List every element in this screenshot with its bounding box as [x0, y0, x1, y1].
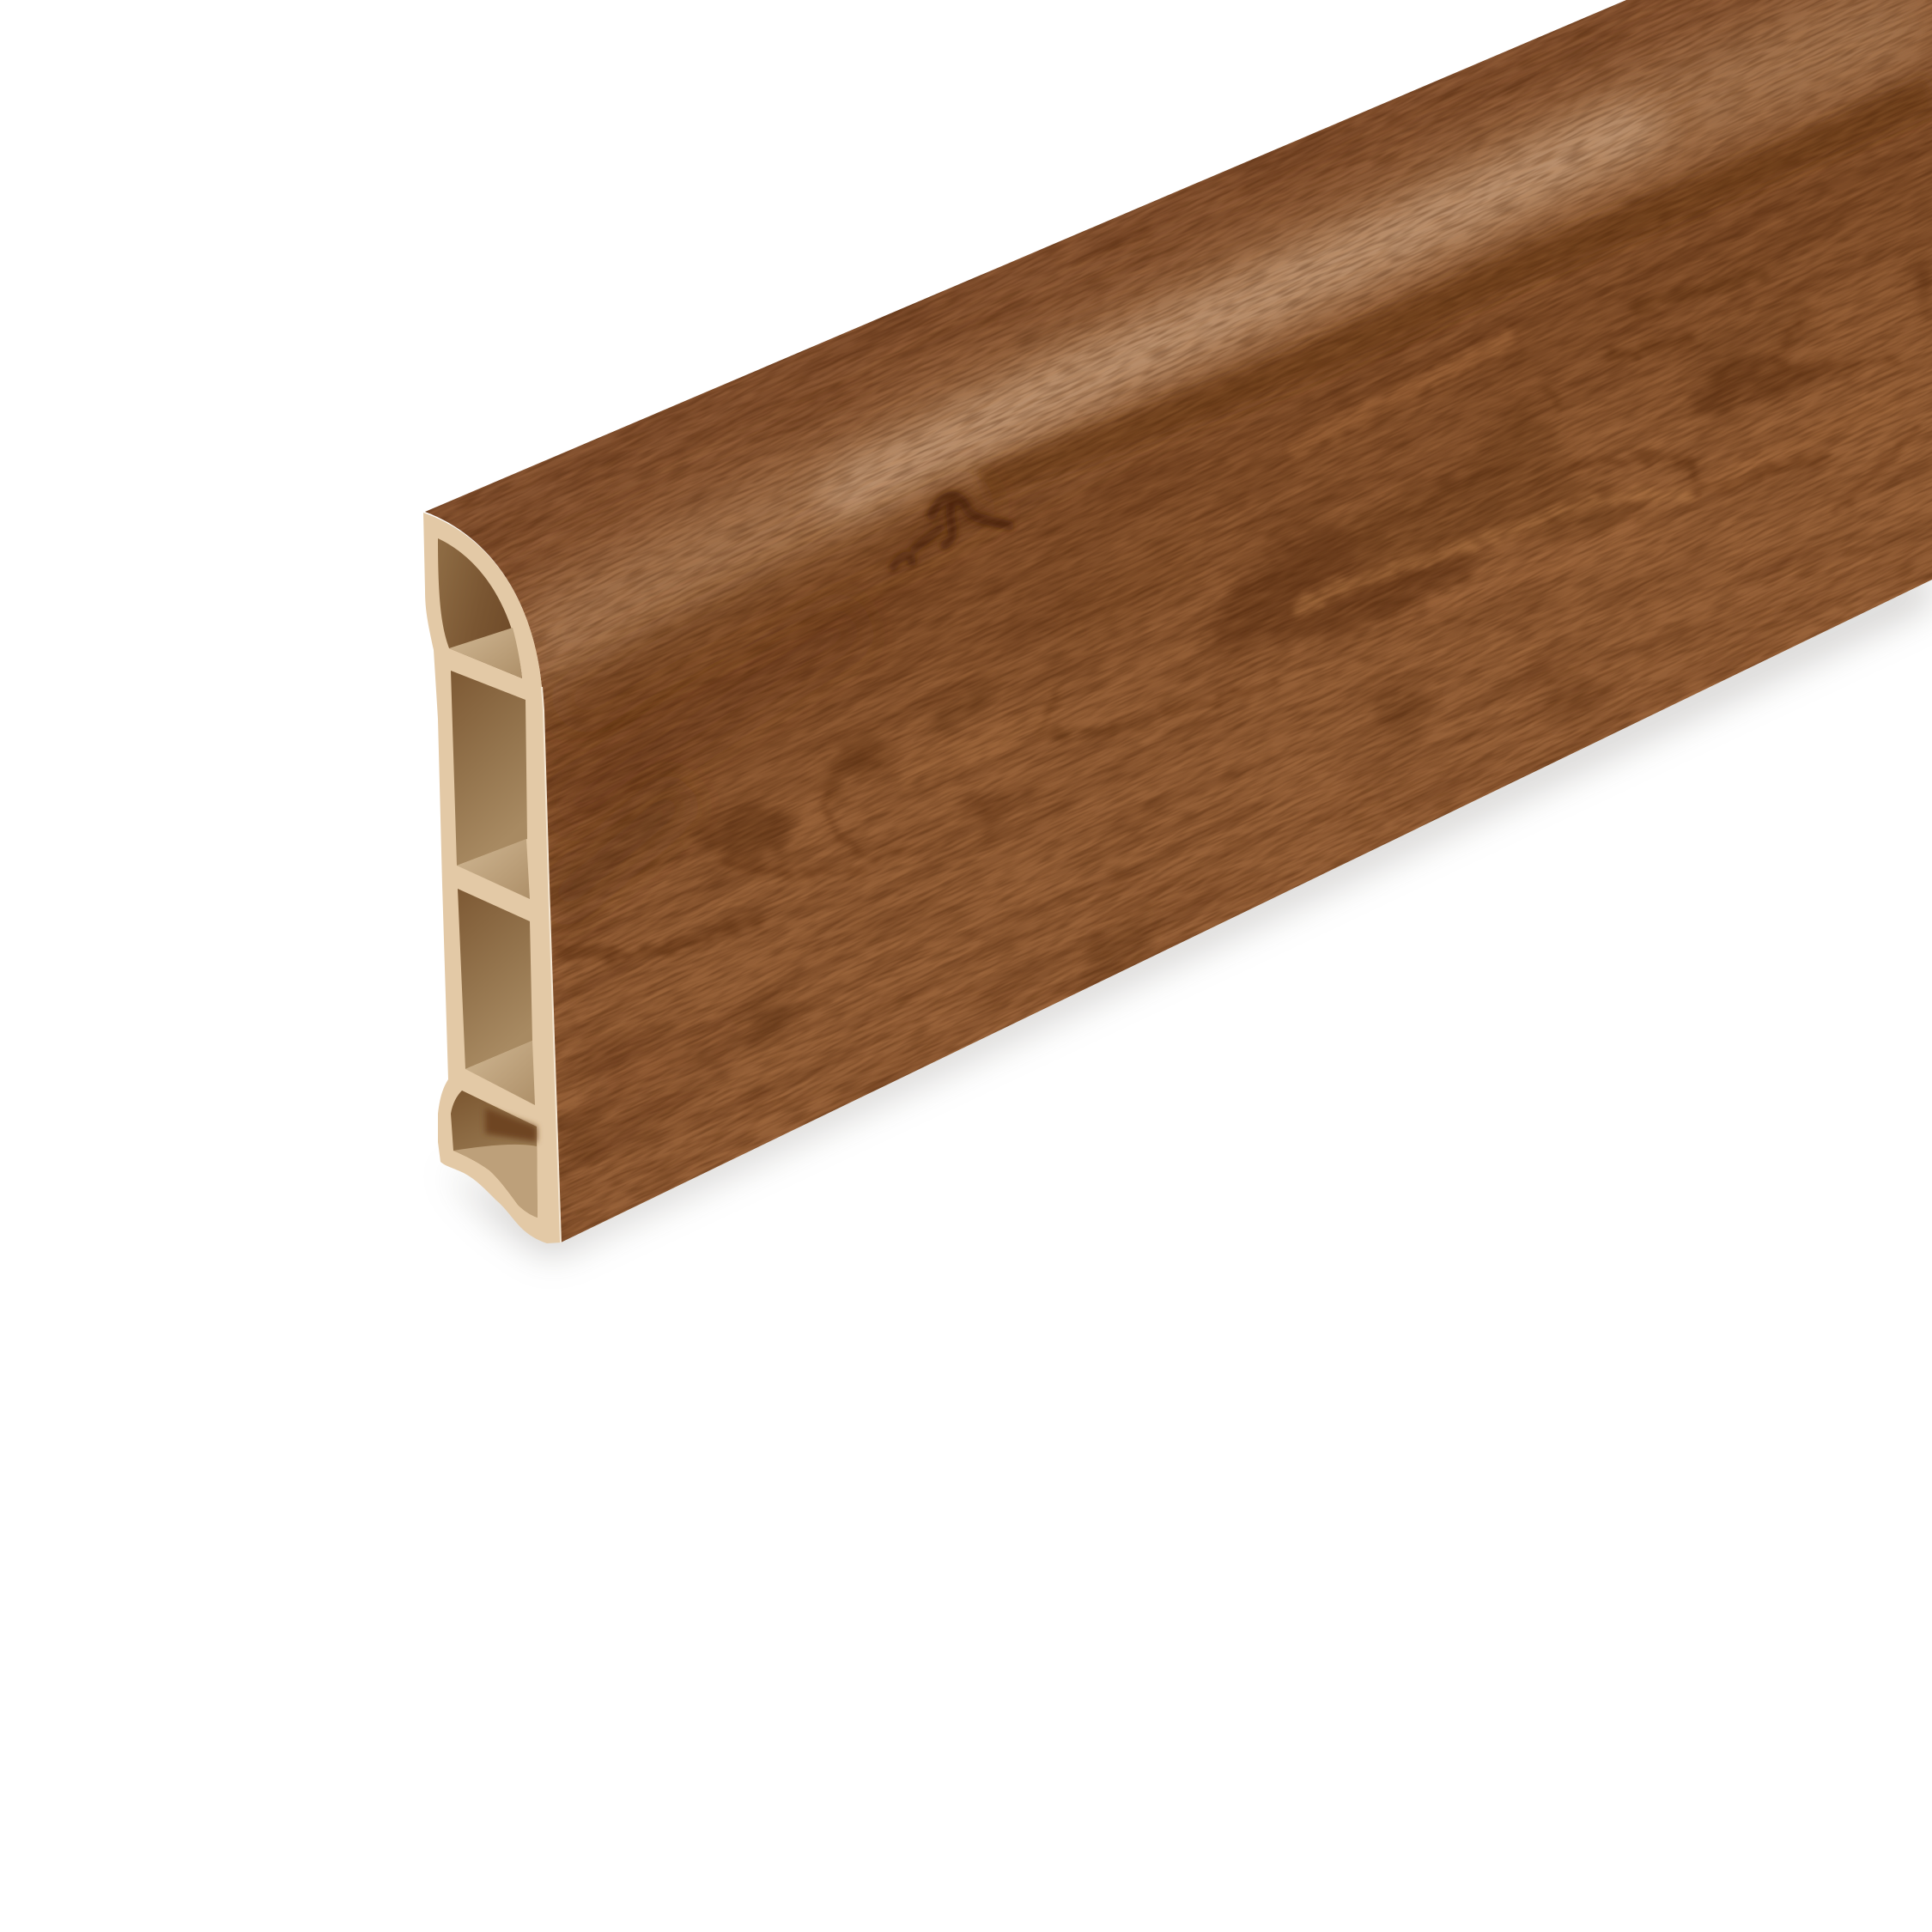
product illustration: skirting board: [423, 0, 1932, 1267]
knot: [893, 489, 1009, 571]
base colour across the profile: [425, 0, 1932, 1242]
dark shading under the shoulder: [550, 93, 1932, 908]
coarse grain texture: [438, 0, 1932, 1242]
cell 4: foot chamber: [451, 1091, 538, 1218]
cell 2: upper rectangular chamber: [451, 671, 530, 899]
soft floor shadow: [447, 567, 1932, 1255]
light grain stripes: [910, 340, 1889, 777]
profile outer shell: [423, 513, 561, 1243]
grain line work: [557, 274, 1917, 955]
end-cut hollow profile: [423, 513, 561, 1243]
cathedral grain figures: filled dark lobes: [557, 249, 1932, 1176]
cut edge highlight: [542, 687, 561, 1242]
cell 3: lower rectangular chamber: [458, 889, 535, 1105]
wood face of the board: [425, 0, 1932, 1242]
cell 1: arched chamber: [438, 538, 522, 678]
rounded-shoulder highlight: [558, 26, 1889, 640]
